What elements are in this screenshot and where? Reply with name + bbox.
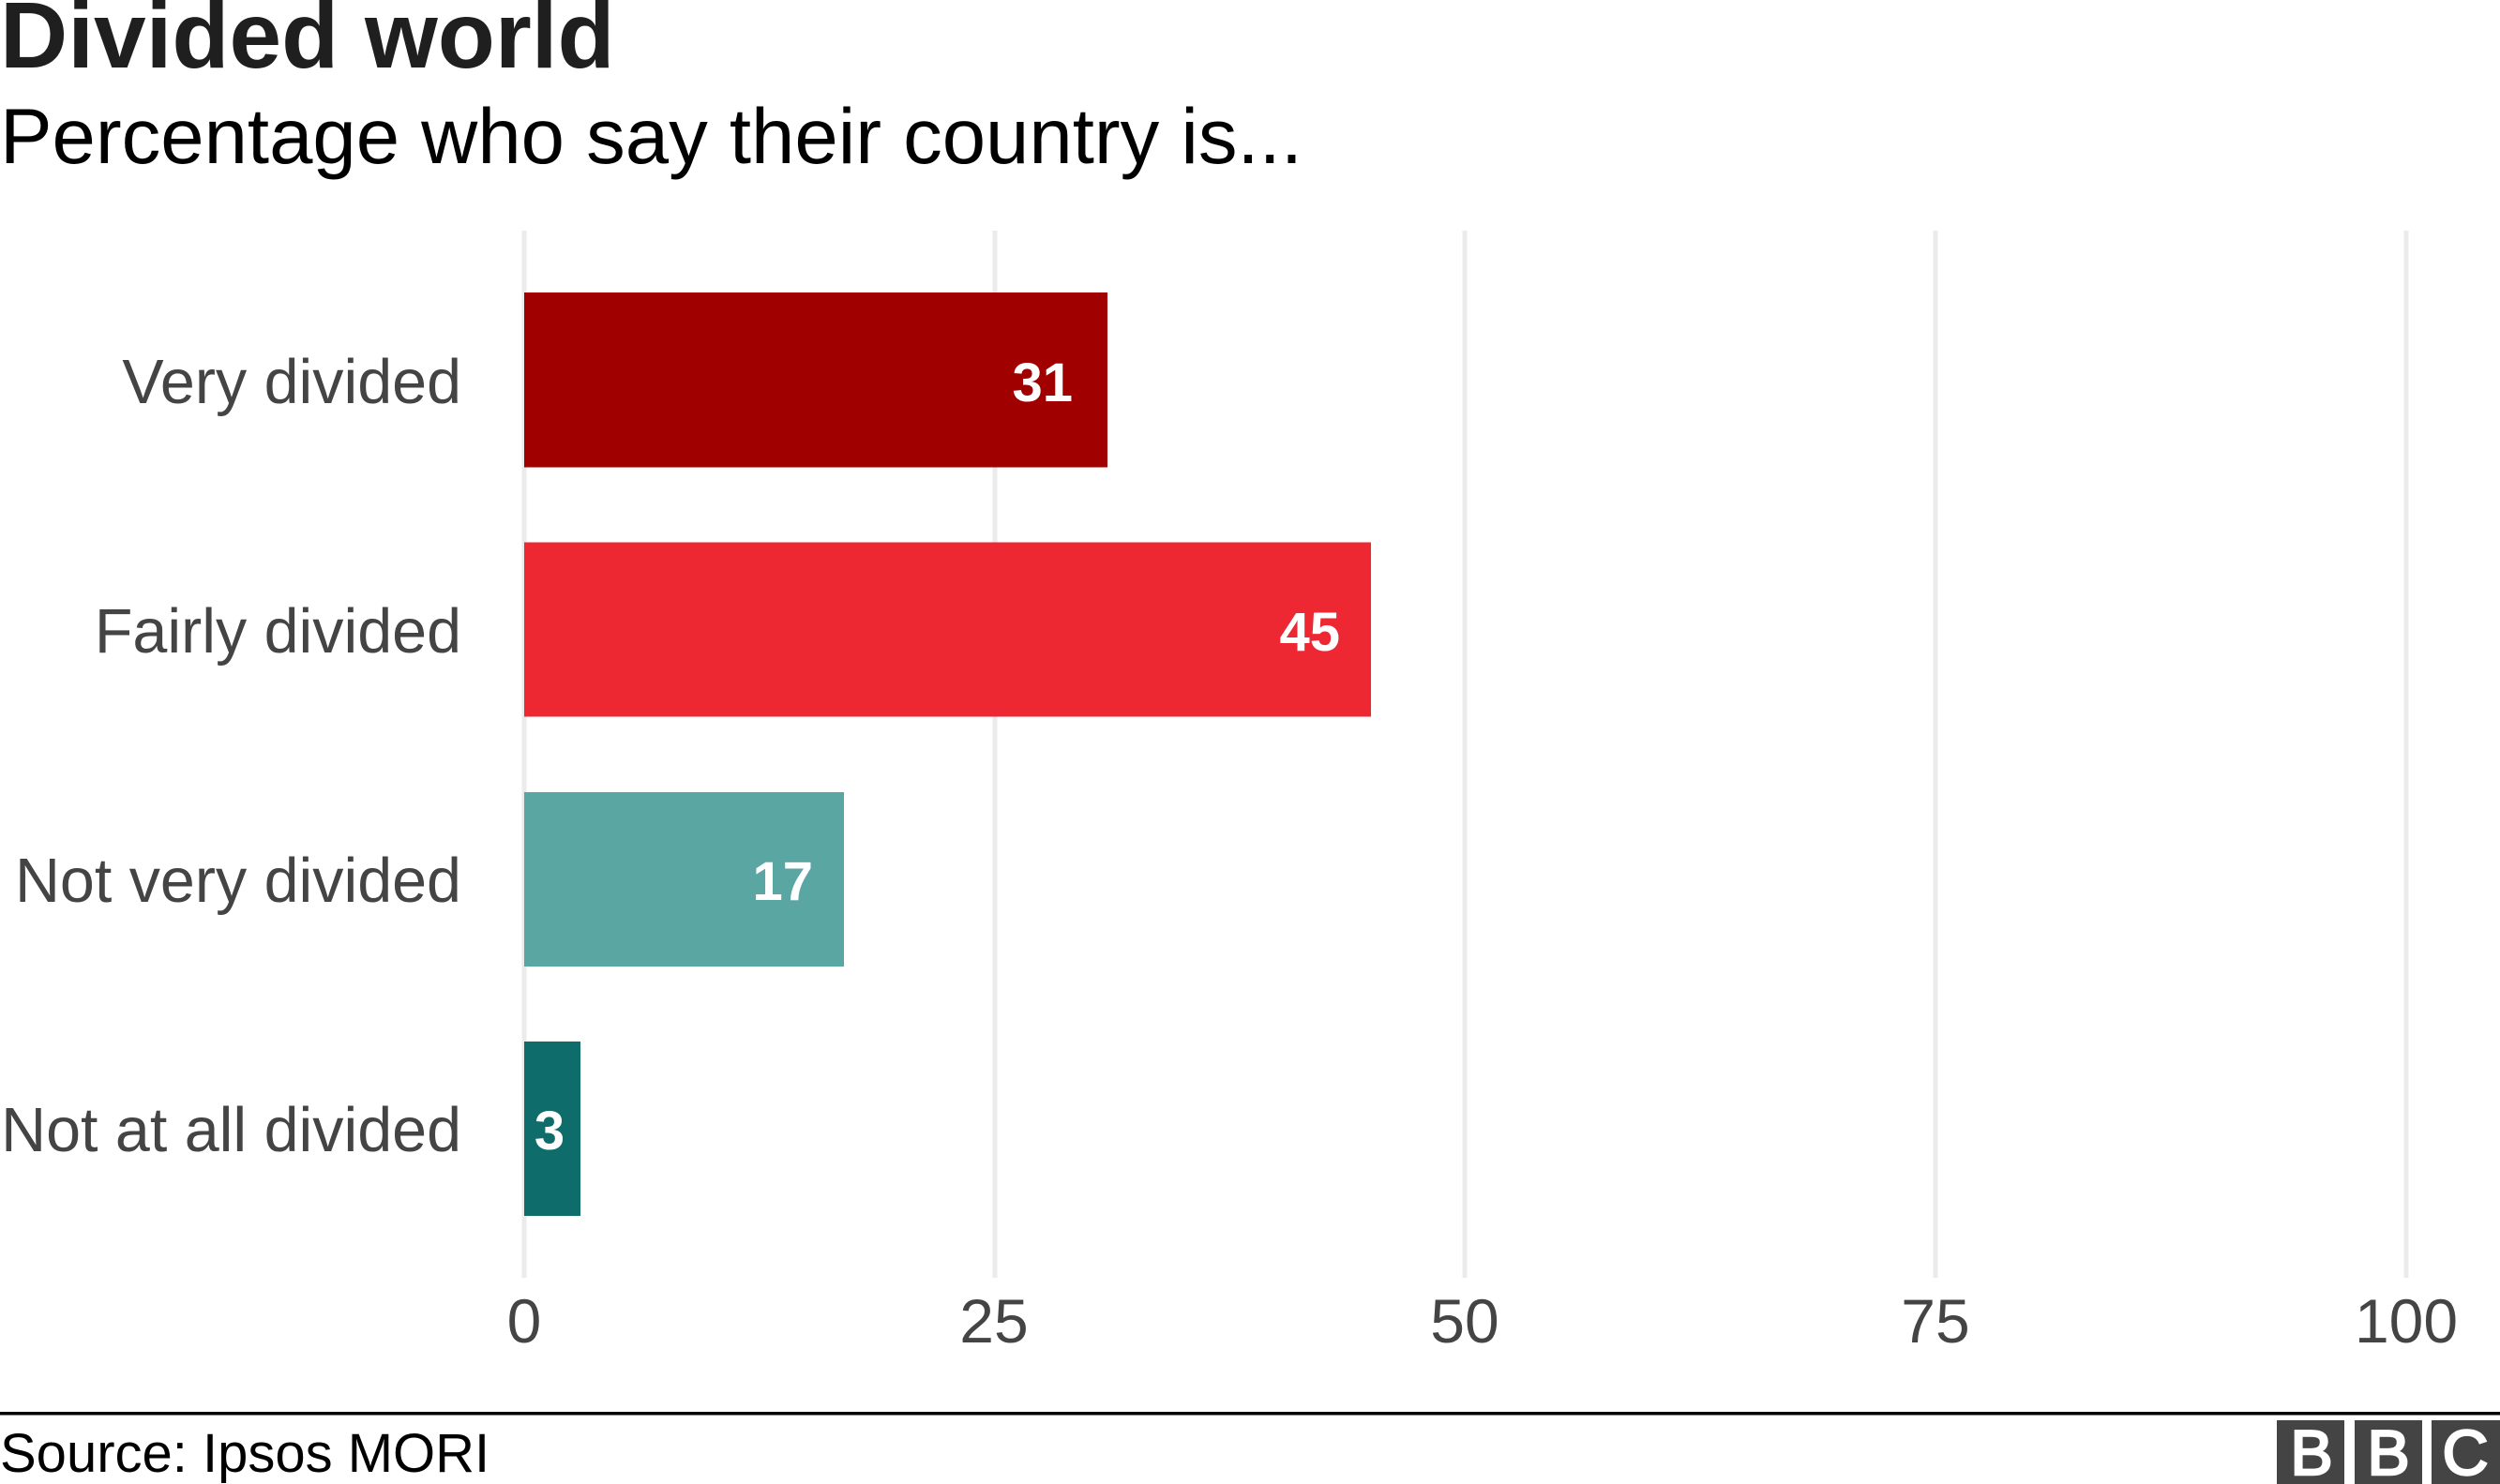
bar: not very divided: 17 [752, 851, 813, 912]
x axis labels: 25 [959, 1286, 1029, 1356]
bar: fairly divided: Fairly divided [95, 597, 461, 667]
x axis labels: 100 [2355, 1286, 2458, 1356]
bar: not very divided: Not very divided [15, 847, 461, 916]
icon: BBC logo [2277, 1417, 2500, 1484]
footer rule [0, 1412, 2500, 1416]
bar: not at all divided [1, 1042, 580, 1216]
x axis labels: 50 [1430, 1286, 1499, 1356]
bar: very divided: Very divided [122, 348, 461, 417]
subtitle: Percentage who say their country is... [0, 93, 1303, 180]
source: Source: Ipsos MORI [0, 1423, 489, 1484]
x axis labels [507, 1286, 2458, 1356]
x axis labels: 0 [507, 1286, 541, 1356]
bar: fairly divided: 45 [1279, 602, 1340, 663]
x axis labels: 75 [1901, 1286, 1970, 1356]
bar: very divided [122, 292, 1107, 467]
bar chart [1, 231, 2458, 1356]
bar: fairly divided [95, 542, 1371, 716]
bar: not very divided [15, 792, 844, 967]
bar: not at all divided: Not at all divided [1, 1096, 461, 1165]
bar: very divided: 31 [1012, 352, 1073, 413]
bar: not at all divided: 3 [535, 1101, 565, 1162]
